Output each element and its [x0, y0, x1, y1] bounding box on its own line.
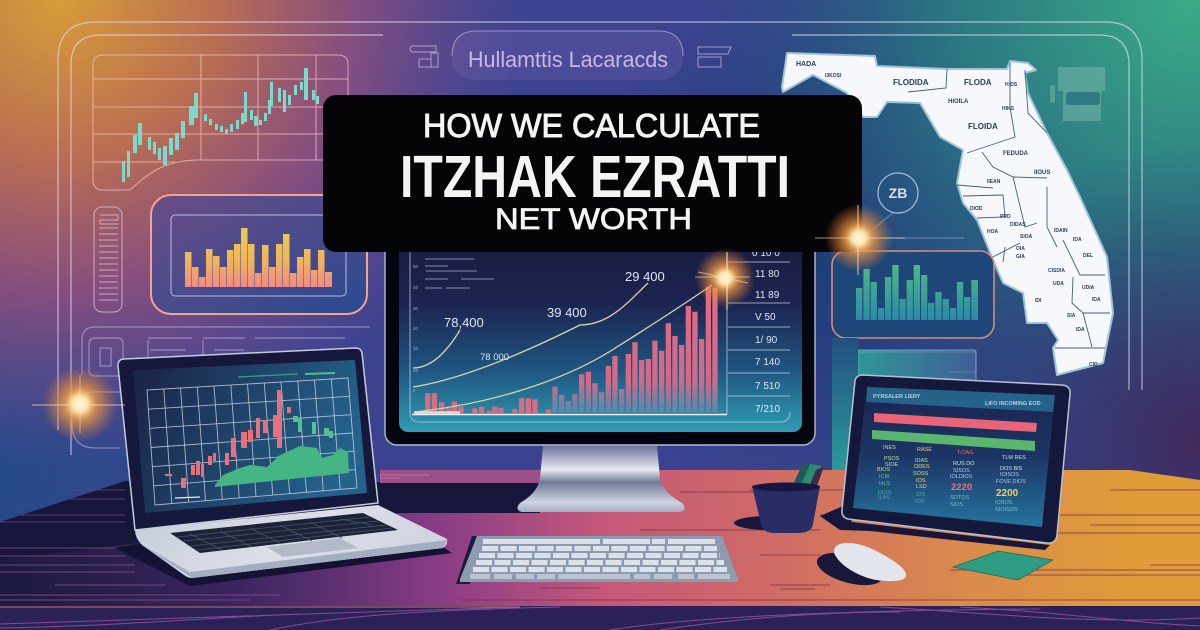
tablet text: TLM RES — [1002, 455, 1026, 461]
map labels: IDA — [1076, 327, 1085, 333]
map labels: OIA — [1016, 246, 1025, 252]
map labels: H:DS — [1005, 82, 1018, 88]
map labels: FEDUDA — [1003, 151, 1029, 157]
map labels: FLOIDA — [968, 122, 998, 131]
tablet text: FOVE DIOS — [996, 479, 1026, 485]
laptop screen — [133, 360, 367, 513]
tablet text: 2220 — [951, 482, 972, 493]
axis ticks: 30 — [413, 306, 419, 311]
map labels: IIEAN — [987, 179, 1001, 185]
chart values: 11 89 — [755, 290, 780, 301]
axis ticks: 05 — [413, 368, 419, 373]
map labels: SIOA — [1020, 234, 1033, 240]
lower left interface outlines — [72, 327, 370, 448]
map labels — [796, 61, 1101, 368]
map labels: CISDIA — [1048, 268, 1065, 274]
badge: ZB: ZB — [889, 185, 907, 201]
title box — [323, 95, 862, 252]
chart values: 7 510 — [755, 381, 780, 392]
green notebook — [953, 551, 1053, 580]
laptop green area — [215, 446, 349, 487]
tablet text: BIOS — [877, 467, 890, 473]
map labels: IDAIN — [1054, 228, 1068, 234]
map labels: DEL — [1083, 253, 1093, 259]
laptop lid — [118, 348, 378, 530]
wood grain lines — [0, 475, 1200, 630]
red bars — [414, 287, 718, 414]
chart frame — [410, 240, 790, 422]
chart values: V 50 — [755, 312, 776, 323]
flare: left — [32, 366, 125, 442]
laptop — [115, 348, 452, 586]
tablet text: SOSS — [913, 471, 929, 477]
map labels: DIOD — [970, 206, 983, 212]
map labels: GIA — [1016, 254, 1025, 260]
tablet text: RASE — [917, 447, 932, 453]
tablet text: IOS — [915, 499, 925, 505]
map: Florida — [782, 53, 1113, 375]
tablet text: IDAS — [915, 458, 928, 464]
tablet text: LSD — [916, 484, 927, 490]
trend lines — [413, 283, 712, 412]
tablet text: SOTOS — [950, 495, 969, 501]
tablet text: IOISOS — [1000, 472, 1019, 478]
tablet text: RUS DO — [953, 461, 975, 467]
map labels: PRD — [1000, 214, 1011, 220]
tablet text: PSOS — [884, 456, 900, 462]
chart values: 78 000 — [480, 352, 509, 363]
laptop keyboard — [170, 513, 398, 553]
search pill — [452, 31, 683, 80]
axis ticks — [413, 264, 419, 393]
chart values: 1/ 90 — [755, 335, 778, 346]
axis ticks: 0 — [413, 388, 416, 393]
scrollbar widget — [94, 207, 122, 312]
map labels: FLODA — [964, 78, 992, 87]
monitor stand — [517, 446, 685, 512]
map labels: DIDAS — [1010, 222, 1026, 228]
tablet text: ILAS — [878, 495, 890, 501]
top right widget icon — [1050, 67, 1105, 121]
map labels: UDIA — [1082, 285, 1095, 291]
tablet text: IOSOS — [995, 500, 1013, 506]
tablet text: DIOS — [878, 490, 892, 496]
teal wall strip — [832, 338, 858, 470]
map labels: SIA — [1067, 313, 1076, 319]
pen cup — [734, 463, 824, 533]
tablet text: IDS — [916, 492, 926, 498]
tablet text: SIOE — [885, 462, 898, 468]
axis ticks: 60 — [413, 264, 419, 269]
tablet text: DOS BIS — [1000, 466, 1023, 472]
map labels: IDA — [1092, 297, 1101, 303]
monitor — [385, 225, 815, 445]
map labels: HIKS — [1002, 106, 1015, 112]
small interface icons beside pill — [410, 46, 731, 67]
tablet text: SIOISOS — [995, 507, 1018, 513]
laptop base — [135, 505, 447, 578]
panel: candlestick chart — [93, 55, 348, 190]
axis ticks: 40 — [413, 285, 419, 290]
map labels: UDA — [1053, 281, 1064, 287]
title line 2: ITZHAK EZRATTI — [400, 144, 790, 210]
tablet text: PYRSALER LIERY — [873, 394, 921, 400]
chart values: 78,400 — [444, 315, 484, 330]
tablet shadow — [820, 506, 1050, 550]
laptop trackpad — [267, 538, 358, 557]
map labels: HIOILA — [948, 99, 969, 105]
mouse — [814, 543, 906, 591]
desk — [0, 470, 1200, 630]
panel: orange bar chart — [151, 195, 367, 314]
chart values: 11 80 — [755, 269, 780, 280]
chart values: 0 10 0 — [752, 248, 780, 259]
map labels: HADA — [796, 61, 816, 68]
map labels: CID — [1089, 362, 1098, 368]
tablet bars — [874, 413, 1037, 432]
axis ticks: 10 — [413, 346, 419, 351]
chart values: 7/210 — [755, 404, 780, 415]
map labels: HOA — [987, 229, 998, 235]
tablet text — [873, 394, 1041, 513]
chart values: 39 400 — [547, 305, 587, 320]
tablet text: ICIB — [879, 474, 890, 480]
map labels: IDI — [1035, 298, 1042, 304]
tablet text: ODES — [914, 464, 930, 470]
tablet text: 2200 — [996, 488, 1019, 499]
flare: monitor — [695, 248, 755, 310]
chart values: 7 140 — [755, 357, 780, 368]
tablet text: T.OAG — [957, 450, 974, 456]
keyboard — [456, 536, 738, 584]
flare: title corner — [815, 204, 905, 275]
badge: ZB — [862, 173, 964, 238]
chart values: 29 400 — [625, 269, 665, 284]
chart values — [444, 248, 780, 415]
tablet text: INES — [883, 445, 896, 451]
tablet text: SIOS — [950, 502, 963, 508]
monitor screen — [399, 235, 802, 432]
tablet screen — [853, 387, 1055, 527]
laptop candles — [165, 390, 291, 488]
title line 3: NET WORTH — [495, 203, 692, 236]
title line 1: HOW WE CALCULATE — [423, 107, 760, 144]
panel: teal preview behind tablet — [850, 350, 976, 410]
map labels: IDA — [1073, 237, 1082, 243]
map labels: IIOUS — [1034, 170, 1050, 176]
laptop grid — [147, 378, 357, 505]
tablet text: I4LS — [879, 481, 891, 487]
bars: orange chart — [185, 228, 332, 287]
map labels: FLODIDA — [893, 78, 929, 87]
panel: green bar chart — [832, 251, 994, 338]
dashboard frame outlines — [58, 22, 1142, 455]
tablet text: IOLDIOS — [950, 474, 973, 480]
tablet text: LIFO INCOMING EOD — [985, 401, 1041, 407]
search pill: Hullamttis Lacaracds — [468, 47, 668, 72]
tablet text: IOS — [916, 478, 926, 484]
map labels: I3KOSI — [825, 73, 842, 79]
axis ticks: 20 — [413, 326, 419, 331]
laptop shadow — [115, 505, 452, 586]
tablet text: SISOS — [953, 468, 970, 474]
tablet — [842, 375, 1070, 543]
